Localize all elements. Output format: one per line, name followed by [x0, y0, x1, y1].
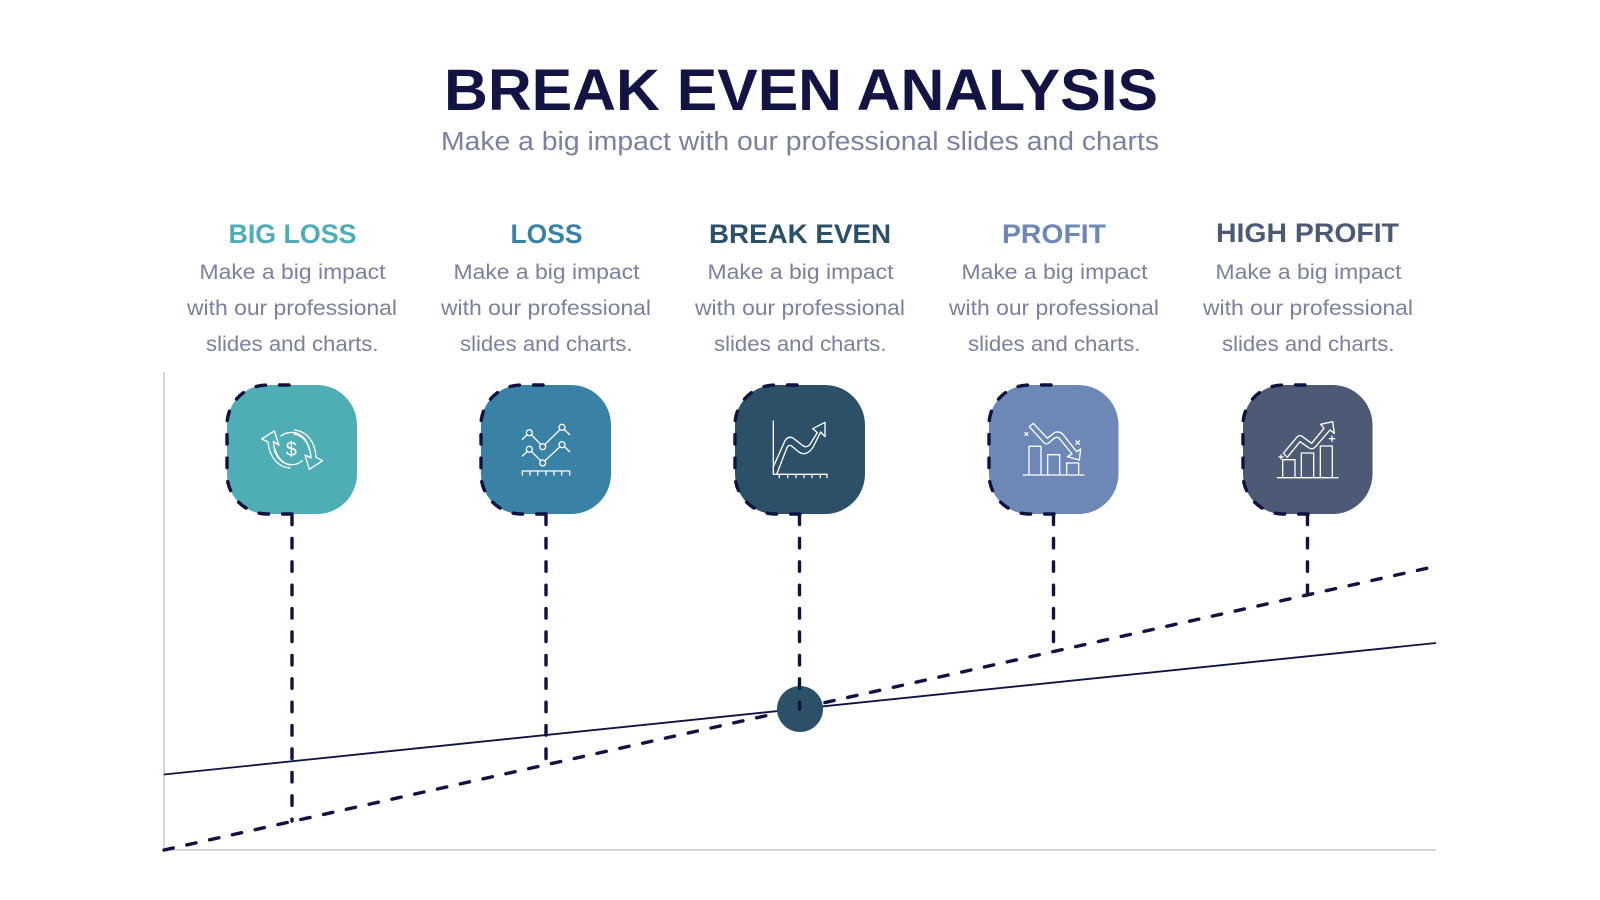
text block: break even: Make a big impact — [708, 260, 894, 284]
text block: high profit: with our professional — [1202, 296, 1413, 320]
icon tile: profit — [989, 385, 1118, 514]
text block: big loss: with our professional — [186, 296, 397, 320]
text block: big loss: slides and charts. — [206, 332, 378, 356]
icon: circular money arrows — [262, 430, 323, 469]
panel: profit — [948, 219, 1159, 650]
heading: break even: BREAK EVEN — [709, 219, 891, 249]
cost line: dashed — [164, 568, 1428, 850]
text block: profit: slides and charts. — [968, 332, 1140, 356]
connector: high profit — [1243, 385, 1308, 596]
icon: rising area chart — [773, 421, 827, 478]
icon tile: loss — [481, 385, 611, 514]
panel: big loss — [186, 219, 397, 821]
icon tile: break even — [735, 385, 865, 514]
text block: break even — [694, 260, 905, 356]
text block: profit: Make a big impact — [962, 260, 1148, 284]
revenue line: solid — [164, 643, 1436, 774]
panel: loss — [440, 219, 651, 765]
text block: high profit — [1202, 260, 1413, 356]
icon: circular money arrows: $ — [286, 439, 297, 461]
title: BREAK EVEN ANALYSIS — [444, 58, 1158, 123]
connector: break even — [735, 385, 800, 709]
connector: loss — [481, 385, 546, 765]
text block: loss: Make a big impact — [454, 260, 640, 284]
text block: loss: slides and charts. — [460, 332, 632, 356]
text block: high profit: slides and charts. — [1222, 332, 1394, 356]
chart axes — [164, 372, 1436, 850]
heading: loss: LOSS — [510, 219, 582, 249]
text block: loss: with our professional — [440, 296, 651, 320]
break-even point marker — [777, 686, 823, 732]
connector: profit — [989, 385, 1054, 650]
text block: big loss: Make a big impact — [200, 260, 386, 284]
icon tile: big loss — [227, 385, 357, 514]
text block: break even: slides and charts. — [714, 332, 886, 356]
heading: big loss: BIG LOSS — [228, 219, 356, 249]
icon: dual line chart — [522, 424, 570, 475]
heading: high profit: HIGH PROFIT — [1216, 218, 1399, 248]
subtitle: Make a big impact with our professional slides and charts — [441, 128, 1159, 156]
text block: profit — [948, 260, 1159, 356]
connector: big loss — [227, 385, 292, 821]
heading: profit: PROFIT — [1002, 219, 1106, 249]
icon tile: high profit — [1243, 385, 1372, 514]
icon: falling bar chart — [1023, 423, 1084, 475]
text block: loss — [440, 260, 651, 356]
text block: profit: with our professional — [948, 296, 1159, 320]
icon: rising bar chart — [1277, 422, 1338, 478]
panel: break even — [694, 219, 905, 709]
text block: break even: with our professional — [694, 296, 905, 320]
text block: big loss — [186, 260, 397, 356]
text block: high profit: Make a big impact — [1216, 260, 1402, 284]
panel: high profit — [1202, 218, 1413, 596]
